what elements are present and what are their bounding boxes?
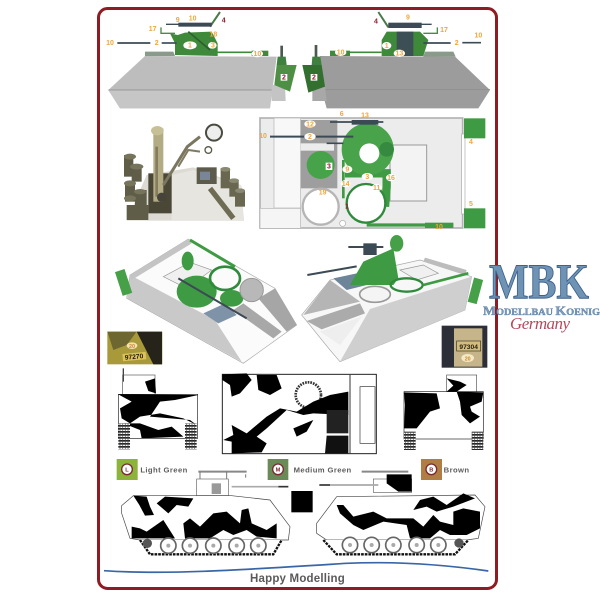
plan part numbers: 3 — [365, 174, 369, 181]
plan part numbers: 12 — [306, 121, 314, 128]
MBK logo: MODELLBAU KOENIG — [483, 303, 600, 318]
side door — [272, 46, 297, 101]
MBK logo — [483, 253, 600, 333]
part numbers: 9 — [406, 14, 410, 21]
colour key: light green — [117, 459, 188, 480]
photo inset right — [442, 326, 487, 368]
top right hull view — [302, 12, 490, 108]
plan part numbers: 6 — [340, 111, 344, 118]
turret — [330, 12, 451, 57]
plan part numbers: 1 — [345, 203, 349, 210]
photo inset left: 97270 — [125, 353, 144, 362]
colour key: brown — [421, 459, 469, 480]
part numbers: 2 — [455, 40, 459, 47]
part numbers: 18 — [209, 32, 217, 39]
plan part numbers: 5 — [469, 201, 473, 208]
top plan drawing — [260, 118, 485, 228]
left side camo vehicle — [122, 472, 290, 554]
colour key: medium green: M — [276, 468, 281, 474]
isometric hull views — [107, 235, 487, 368]
footer slogan: Happy Modelling — [250, 573, 345, 585]
part numbers: 1 — [385, 43, 389, 50]
side door — [302, 45, 327, 101]
part numbers: 17 — [149, 26, 157, 33]
part numbers: 10 — [474, 32, 482, 39]
part numbers: 10 — [106, 40, 114, 47]
colour key: brown: B — [429, 468, 433, 474]
part numbers: 10 — [253, 51, 261, 58]
part numbers: 4 — [374, 18, 378, 25]
plan part numbers: 14 — [342, 181, 350, 188]
MBK logo: Germany — [510, 314, 570, 333]
part numbers — [106, 16, 261, 58]
plan part numbers: 3 — [327, 164, 331, 171]
right side camo vehicle — [317, 472, 485, 554]
part numbers: 10 — [337, 49, 345, 56]
part numbers: 17 — [440, 27, 448, 34]
plan part numbers: 13 — [361, 112, 369, 119]
part numbers: 3 — [211, 43, 215, 50]
plan part numbers: 11 — [373, 185, 380, 192]
plan part numbers: 2 — [308, 134, 312, 141]
colour key: light green: L — [125, 468, 129, 474]
top left hull view — [106, 12, 297, 108]
camouflage top row — [118, 368, 483, 454]
page frame — [98, 8, 496, 588]
decorative blue curve — [104, 563, 488, 572]
part numbers: 4 — [222, 18, 226, 25]
side door: 2 — [312, 75, 316, 82]
left isometric hull — [115, 239, 297, 363]
legend and side views — [104, 459, 488, 572]
photo inset left: 20 — [129, 344, 135, 350]
photo inset right: 20 — [465, 356, 471, 362]
photo inset right: 97304 — [459, 344, 478, 351]
plan part numbers: 16 — [387, 175, 395, 182]
colour key: black swatch — [291, 491, 313, 512]
part numbers: 9 — [176, 17, 180, 24]
plan part numbers: 19 — [319, 190, 327, 197]
plan part numbers: 10 — [259, 133, 267, 140]
turret photo and top plan — [124, 111, 485, 231]
plan part numbers: 9 — [345, 167, 349, 174]
side door: 2 — [282, 75, 286, 82]
photo of resin parts — [124, 125, 245, 221]
plan part numbers — [259, 111, 473, 231]
right isometric hull — [302, 235, 483, 362]
top view — [222, 373, 376, 454]
front view — [118, 368, 198, 449]
plan part numbers: 4 — [469, 139, 473, 146]
colour key: brown: Brown — [444, 465, 469, 474]
colour key: light green: Light Green — [140, 465, 188, 474]
part numbers: 1 — [188, 43, 192, 50]
plan part numbers: 10 — [435, 224, 443, 231]
turret — [161, 12, 268, 57]
rear view — [404, 375, 483, 450]
colour key: medium green: Medium Green — [294, 465, 352, 474]
part numbers: 13 — [395, 51, 403, 58]
colour key: medium green — [268, 459, 352, 480]
part numbers — [337, 14, 482, 58]
photo inset left — [107, 332, 162, 364]
part numbers: 10 — [189, 16, 197, 23]
part numbers: 2 — [155, 40, 159, 47]
